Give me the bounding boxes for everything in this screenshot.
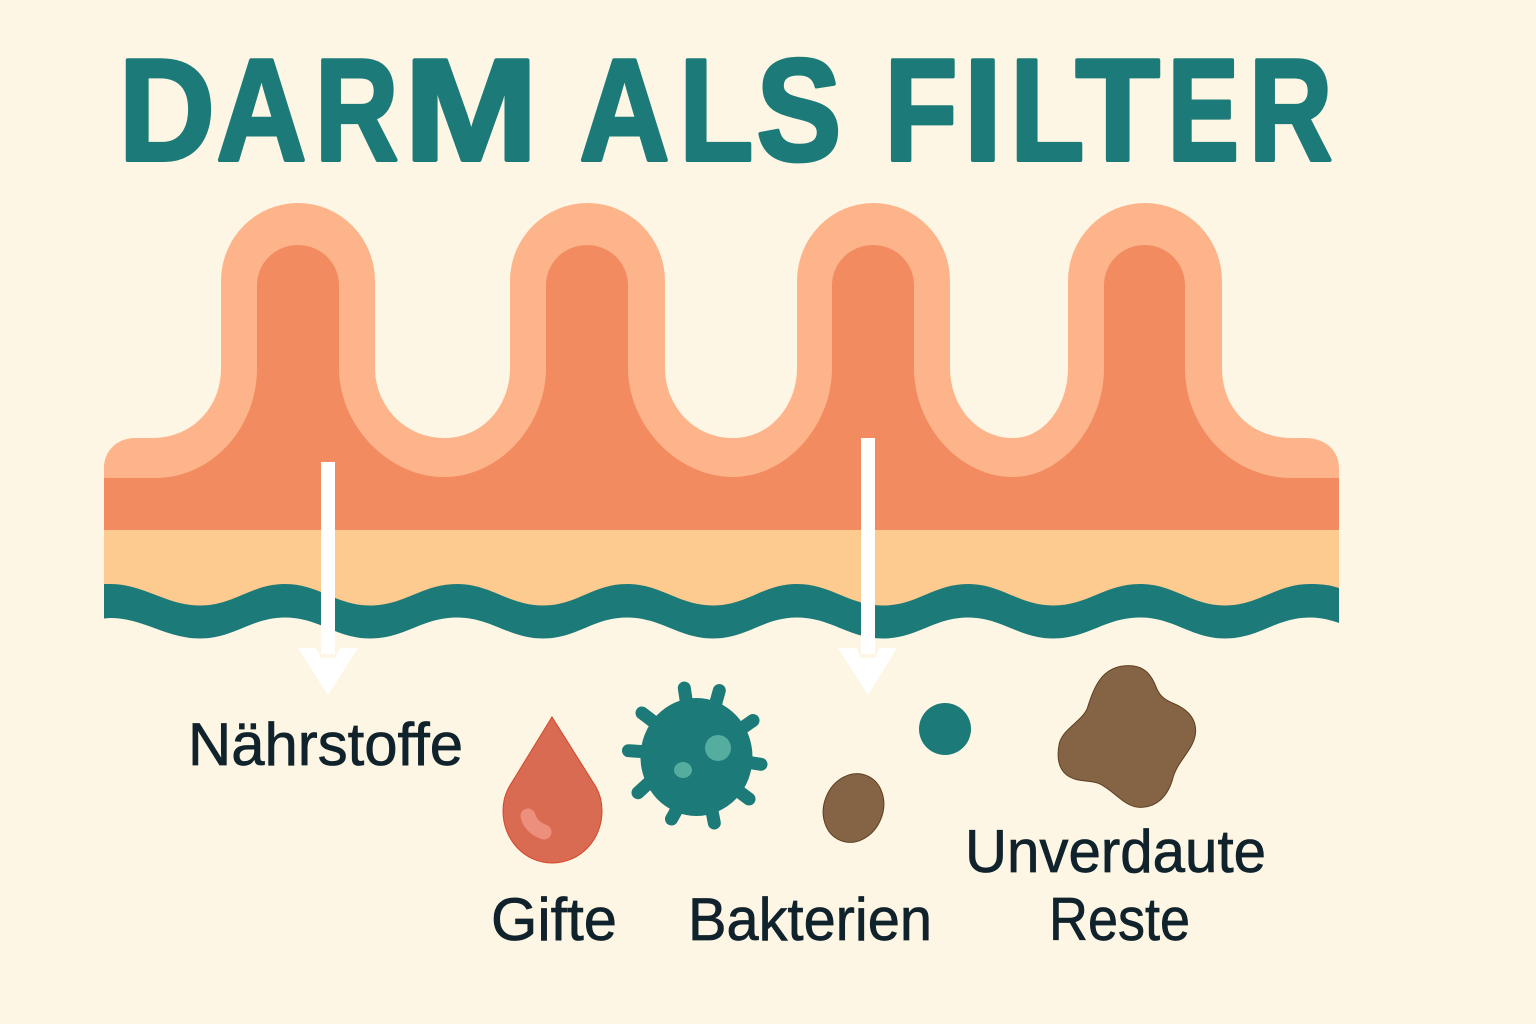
label: Unverdaute Reste: Reste	[1049, 886, 1190, 953]
icon: brown bacterium	[813, 764, 894, 852]
title: I	[964, 30, 1002, 192]
label: Nährstoffe: Nährstoffe	[188, 711, 463, 778]
icon: virus-like bacterium	[628, 688, 761, 823]
label: Gifte: Gifte	[491, 886, 617, 953]
title: E	[1168, 29, 1239, 191]
arrow: second passage through wall	[838, 438, 897, 695]
title: R	[1249, 28, 1332, 191]
submucosa band	[104, 530, 1339, 610]
title: R	[315, 28, 398, 191]
label: Unverdaute Reste: Unverdaute	[965, 818, 1266, 885]
villi outer layer	[104, 203, 1339, 480]
title: S	[756, 29, 841, 191]
diagram: intestinal wall	[104, 203, 1339, 638]
label: Unverdaute Reste	[965, 818, 1266, 953]
title: L	[1010, 30, 1084, 191]
title	[119, 28, 1332, 192]
label: Bakterien: Bakterien	[688, 886, 932, 953]
arrow: nutrients passing through	[298, 462, 358, 695]
title: A	[216, 29, 306, 191]
title: L	[679, 30, 753, 191]
villi inner tissue layer	[104, 245, 1339, 531]
title: A	[580, 29, 669, 191]
icon: undigested residue blob	[1058, 666, 1196, 807]
title: M	[404, 29, 538, 191]
title: T	[1076, 29, 1160, 191]
icon: teal round bacterium	[919, 703, 971, 755]
title: D	[119, 30, 215, 191]
title: F	[885, 30, 957, 192]
icon: toxin drop	[503, 717, 602, 863]
teal wavy muscle layer	[104, 584, 1339, 638]
